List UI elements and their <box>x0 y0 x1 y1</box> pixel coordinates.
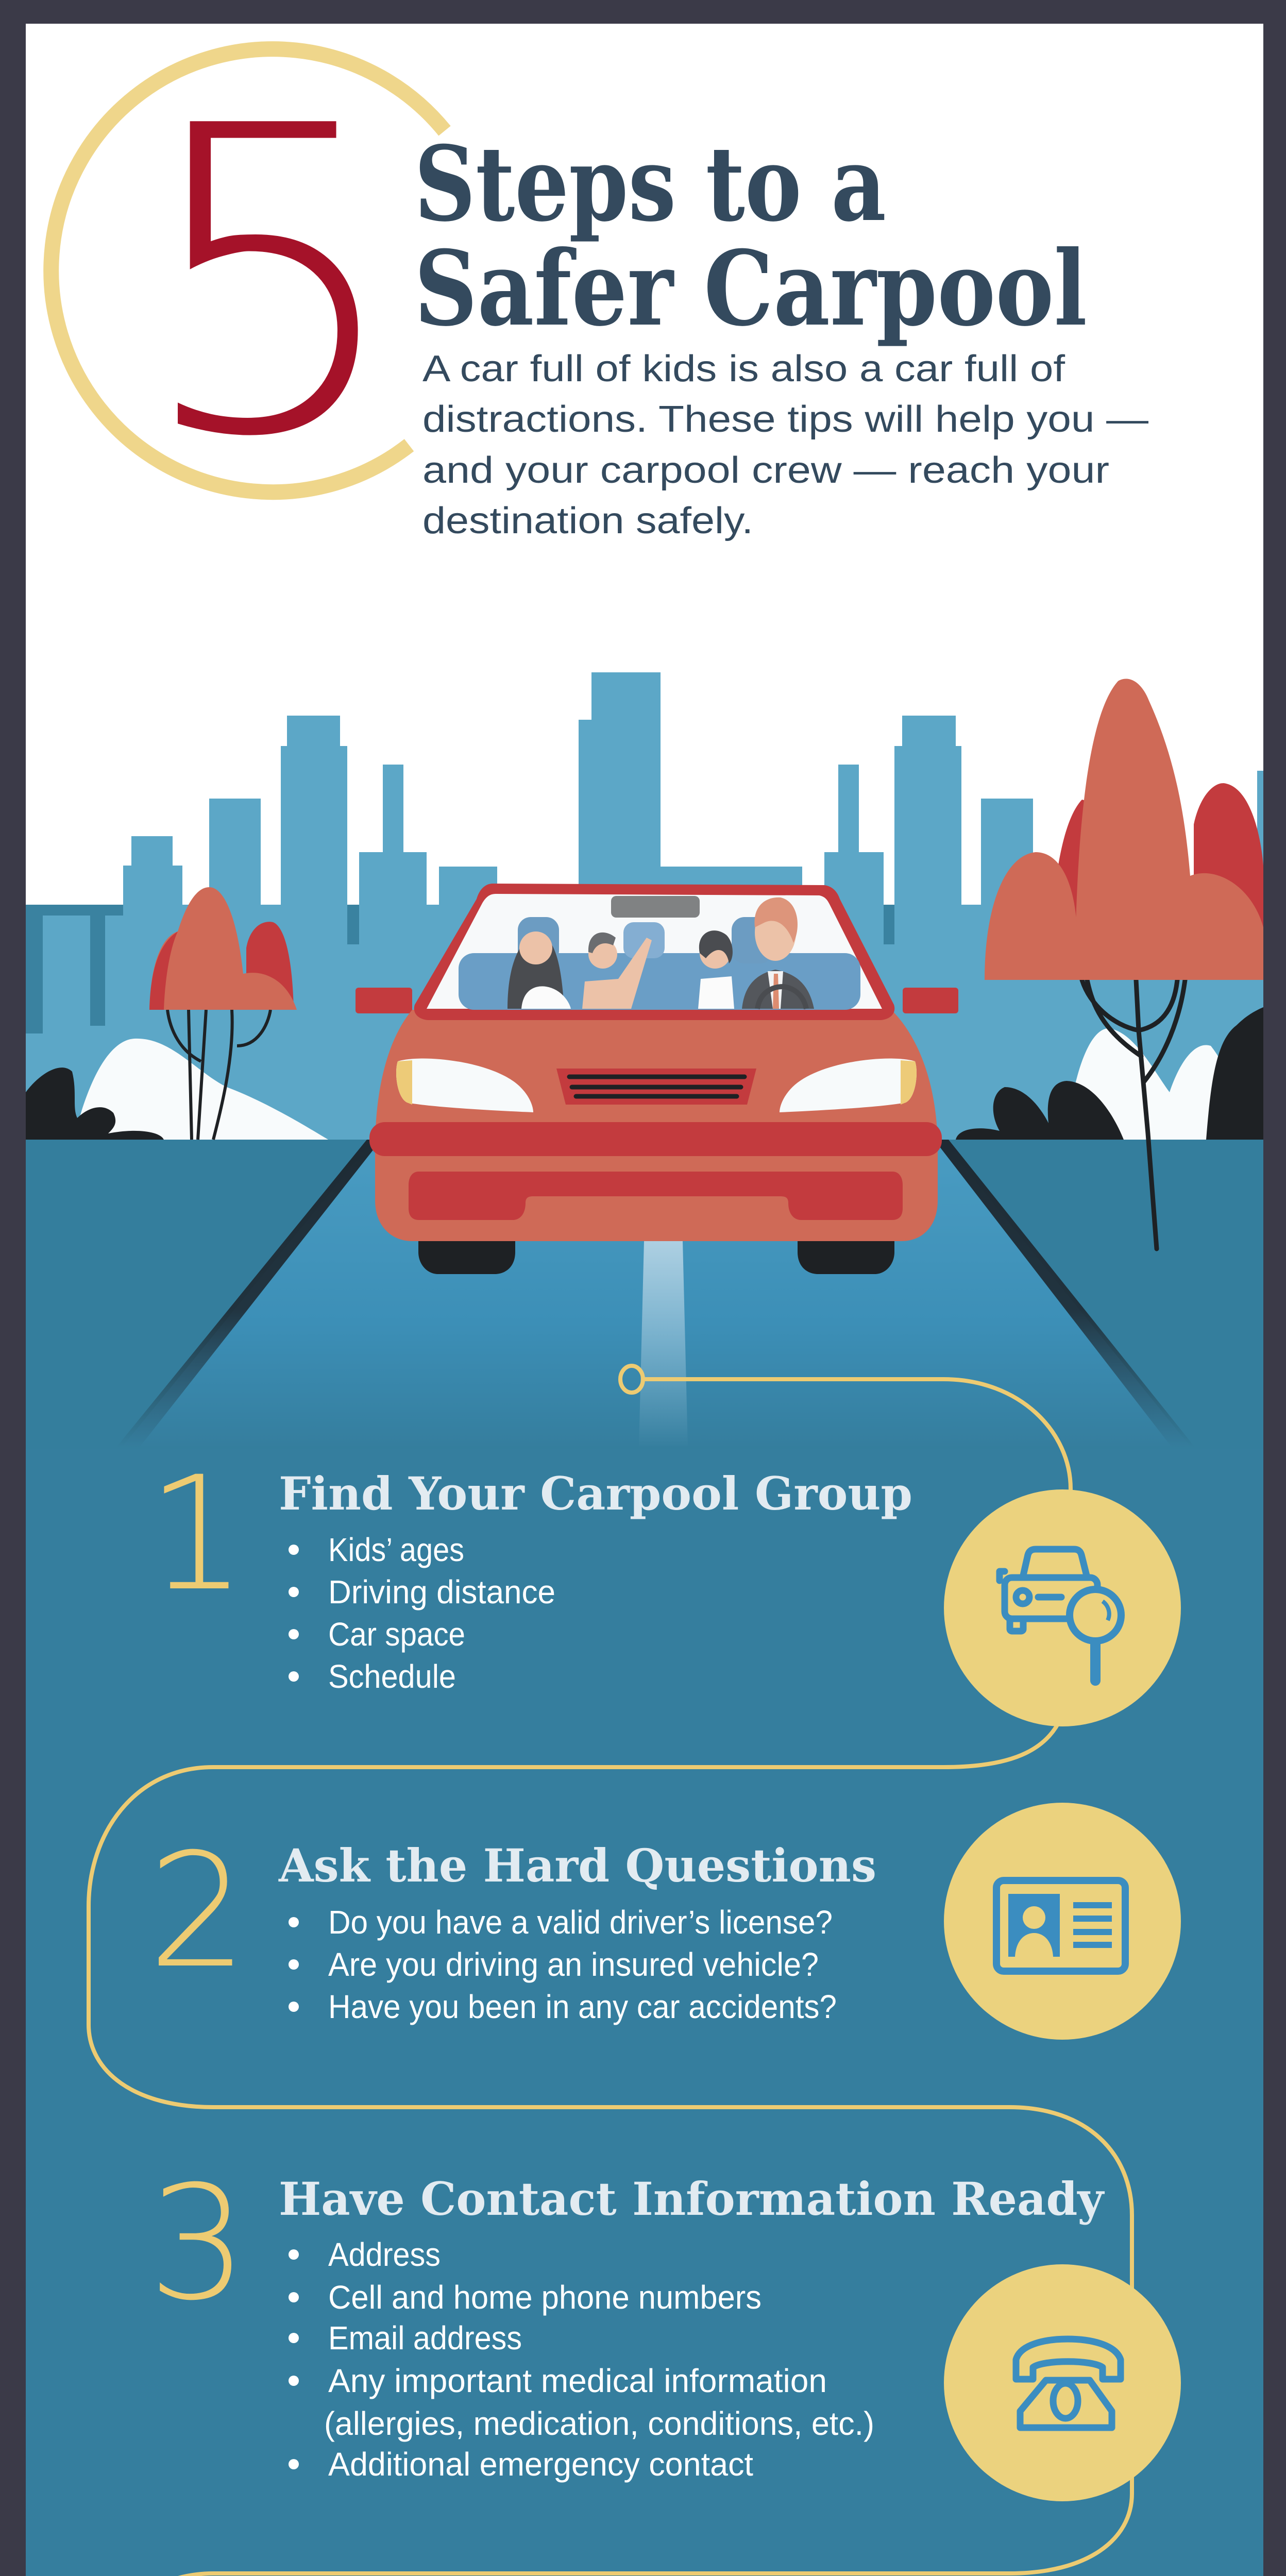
grille <box>556 1069 756 1105</box>
ground and road <box>26 1140 1263 2576</box>
kid with phone <box>700 938 731 969</box>
road centre stripe <box>639 1241 688 1448</box>
skyline buildings <box>26 672 1263 1142</box>
bullets 1 <box>289 1531 555 1695</box>
white hills <box>74 1039 328 1140</box>
step 1 <box>147 1443 1181 1726</box>
lower panel <box>409 1172 903 1220</box>
seats <box>459 953 860 1010</box>
subtitle: distractions. These tips will help you — <box>422 399 1148 440</box>
rear-view mirror <box>611 896 700 918</box>
road edge lines <box>116 1140 381 1448</box>
scene: city skyline with car <box>26 672 1263 2576</box>
bullets 3: Any important medical information <box>328 2362 827 2399</box>
decorative gold circle arc <box>51 49 445 492</box>
headlights <box>396 1058 533 1112</box>
route path <box>89 1379 1132 2576</box>
icon: telephone <box>944 2264 1181 2501</box>
bullets 3: Address <box>328 2236 441 2273</box>
bullets 2: Are you driving an insured vehicle? <box>328 1946 819 1983</box>
heading 2: Ask the Hard Questions <box>278 1839 876 1892</box>
step 2 <box>148 1803 1181 2040</box>
number 2: 2 <box>148 1820 248 2003</box>
route start marker <box>620 1366 643 1393</box>
car <box>356 884 958 1274</box>
bullets 3: Additional emergency contact <box>328 2446 753 2483</box>
woman <box>507 933 564 1009</box>
bullets 3: Cell and home phone numbers <box>328 2279 762 2316</box>
big number 5: 5 <box>136 38 405 529</box>
mirrors <box>356 988 412 1013</box>
subtitle: and your carpool crew — reach your <box>422 450 1109 491</box>
left tree <box>149 887 297 1140</box>
header <box>51 38 1148 541</box>
subtitle: destination safely. <box>422 500 753 541</box>
black bushes <box>26 1007 1263 1140</box>
icon: car with magnifier <box>944 1489 1181 1726</box>
windshield interior with passengers <box>427 894 882 1010</box>
title: Safer Carpool <box>414 228 1087 349</box>
subtitle <box>422 348 1148 541</box>
heading 3: Have Contact Information Ready <box>279 2172 1105 2226</box>
number 1: 1 <box>147 1443 247 1625</box>
bullets 1: Schedule <box>328 1658 456 1695</box>
windshield frame <box>414 884 894 1020</box>
subtitle: A car full of kids is also a car full of <box>422 348 1065 389</box>
bullets 3: (allergies, medication, conditions, etc.) <box>324 2405 874 2442</box>
right tree <box>985 679 1263 1249</box>
bullets 3: Email address <box>328 2319 522 2357</box>
title <box>414 124 1087 349</box>
bullets 2: Have you been in any car accidents? <box>328 1988 837 2025</box>
wheels <box>418 1236 515 1274</box>
bullets 3 <box>289 2236 874 2483</box>
number 3: 3 <box>148 2152 248 2335</box>
icon: ID card <box>944 1803 1181 2040</box>
heading 1: Find Your Carpool Group <box>279 1467 912 1520</box>
step 3 <box>148 2152 1181 2501</box>
bullets 1: Kids’ ages <box>328 1531 464 1568</box>
driver <box>742 970 814 1009</box>
title: Steps to a <box>414 124 886 245</box>
bullets 1: Car space <box>328 1616 465 1653</box>
body <box>375 1010 938 1241</box>
dark bridge structure <box>26 905 894 1033</box>
waving kid <box>588 940 617 969</box>
bullets 2: Do you have a valid driver’s license? <box>328 1904 833 1941</box>
bumper <box>369 1122 942 1156</box>
bullets 2 <box>289 1904 837 2025</box>
bullets 1: Driving distance <box>328 1573 555 1611</box>
